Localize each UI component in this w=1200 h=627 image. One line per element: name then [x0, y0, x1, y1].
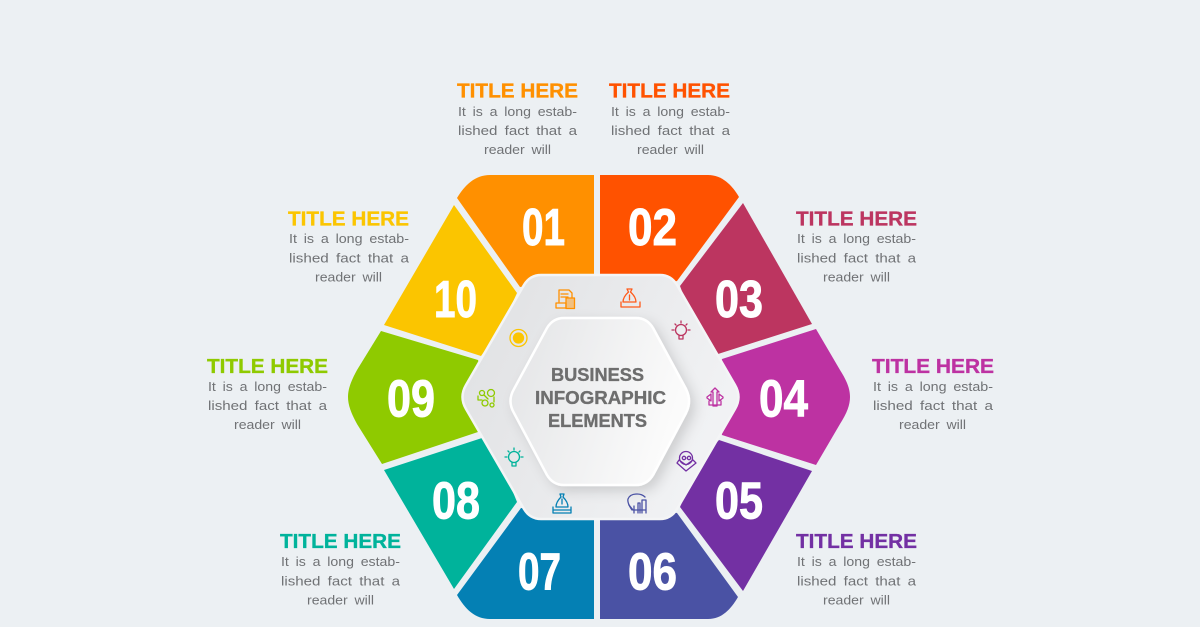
- segment 02: 02: [628, 199, 677, 257]
- text block 10: It is a long estab-: [289, 232, 409, 246]
- segment 01: [457, 175, 594, 287]
- segment 09: 09: [387, 370, 435, 428]
- segment 03: [680, 203, 812, 354]
- segment 01: 01: [522, 199, 565, 257]
- text block 08: lished fact that a: [281, 574, 400, 588]
- segment 09: [348, 331, 490, 464]
- text block 08: TITLE HERE: [280, 530, 401, 553]
- text block 03: TITLE HERE: [796, 208, 917, 230]
- text block 10: TITLE HERE: [288, 208, 409, 230]
- icon: document and calculator: [556, 290, 574, 308]
- segment 07: [457, 508, 594, 619]
- segment 04: [710, 329, 850, 465]
- text block 01: TITLE HERE: [457, 80, 578, 102]
- icon: light bulb: [672, 321, 690, 339]
- icon: network nodes: [478, 390, 494, 407]
- text block 02: lished fact that a: [611, 124, 730, 138]
- segment 07: 07: [518, 544, 561, 602]
- text block 10: [288, 208, 409, 284]
- center heading: [535, 364, 666, 431]
- text block 01: lished fact that a: [458, 124, 577, 138]
- text block 01: [457, 80, 578, 157]
- text block 01: reader will: [484, 143, 551, 157]
- center heading: INFOGRAPHIC: [535, 387, 666, 408]
- segment 06: 06: [628, 544, 677, 602]
- segment 05: [680, 440, 812, 591]
- text block 02: TITLE HERE: [609, 80, 730, 102]
- text block 09: TITLE HERE: [207, 355, 328, 378]
- icon: light bulb: [505, 448, 523, 466]
- text block 01: It is a long estab-: [458, 105, 577, 119]
- text block 10: lished fact that a: [289, 252, 409, 266]
- segment 02: [600, 175, 739, 285]
- text block 08: [280, 530, 401, 608]
- text block 04: TITLE HERE: [872, 355, 994, 378]
- segment 06: [600, 510, 738, 619]
- icon: head and bars: [628, 494, 646, 513]
- icon: arrows: [707, 388, 723, 406]
- text block 08: reader will: [307, 594, 374, 608]
- segment 08: 08: [432, 472, 480, 530]
- segment 08: [384, 438, 517, 589]
- text block 04: It is a long estab-: [873, 380, 993, 394]
- outer hexagon: [462, 275, 738, 519]
- text block 09: It is a long estab-: [208, 380, 327, 394]
- segment 04: 04: [759, 370, 808, 428]
- segment 05: 05: [715, 472, 763, 530]
- text block 05: [796, 530, 917, 608]
- text block 03: [796, 208, 917, 284]
- segment 10: 10: [434, 271, 477, 329]
- text block 03: It is a long estab-: [797, 232, 916, 246]
- text block 09: lished fact that a: [208, 399, 327, 413]
- text block 02: [609, 80, 730, 157]
- text block 08: It is a long estab-: [281, 555, 400, 569]
- text block 03: reader will: [823, 270, 890, 284]
- icon: gear with circular arrows: [510, 330, 527, 346]
- text block 04: lished fact that a: [873, 399, 993, 413]
- center heading: ELEMENTS: [548, 410, 647, 431]
- text block 03: lished fact that a: [797, 252, 916, 266]
- icon: hand and gears: [677, 452, 696, 471]
- icon: money bag on tray: [621, 289, 640, 307]
- segment 03: 03: [715, 271, 763, 329]
- icon: money bag on tray: [553, 494, 571, 513]
- text block 05: It is a long estab-: [797, 555, 916, 569]
- text block 02: It is a long estab-: [611, 105, 730, 119]
- segment 10: [384, 205, 517, 356]
- text block 04: [872, 355, 994, 432]
- center heading: BUSINESS: [551, 364, 644, 385]
- text block 05: lished fact that a: [797, 574, 916, 588]
- inner hexagon: [510, 318, 689, 485]
- text block 05: reader will: [823, 594, 890, 608]
- text block 02: reader will: [637, 143, 704, 157]
- text block 09: reader will: [234, 418, 301, 432]
- text block 09: [207, 355, 328, 432]
- text block 04: reader will: [899, 418, 966, 432]
- text block 10: reader will: [315, 270, 382, 284]
- text block 05: TITLE HERE: [796, 530, 917, 553]
